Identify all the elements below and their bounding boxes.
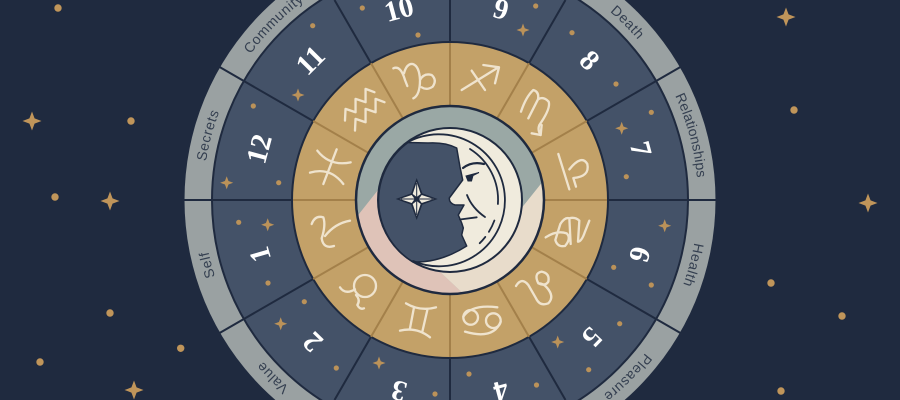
- face details: [463, 163, 484, 168]
- house label: Relationships: Relationships: [676, 92, 706, 177]
- house numbers: 12: [241, 131, 279, 167]
- house numbers: 7: [623, 138, 658, 160]
- house numbers: 8: [573, 44, 606, 77]
- dark moon disc with face profile: [379, 142, 467, 262]
- house numbers: 5: [575, 321, 608, 353]
- house numbers: 1: [243, 243, 278, 266]
- zodiac glyphs: Aries, Taurus, Gemini: [312, 217, 436, 337]
- outer ring: life areas: [184, 0, 716, 400]
- crescent moon with face: [378, 128, 522, 272]
- house numbers: [241, 0, 658, 400]
- house label: Value: Value: [259, 362, 286, 394]
- house label: Health: Health: [684, 244, 704, 286]
- zodiac glyphs: Sagittarius, Scorpio, Libra: [462, 65, 588, 189]
- house numbers: 2: [297, 325, 329, 358]
- central medallion background: [357, 107, 543, 293]
- house label: Death: Death: [610, 5, 642, 39]
- crescent inner arcs: [408, 134, 505, 266]
- zodiac glyphs: Capricorn, Aquarius, Pisces: [310, 64, 435, 184]
- house label: Secrets: Secrets: [197, 110, 218, 160]
- four-point star in moon disc: [396, 178, 438, 220]
- zodiac ring: [292, 42, 608, 358]
- house numbers: 6: [622, 243, 657, 266]
- house decoration stars and dots: [220, 3, 671, 397]
- house label: Self: Self: [198, 253, 214, 278]
- zodiac glyphs: Cancer, Leo, Virgo: [463, 218, 589, 334]
- house numbers: 11: [290, 40, 332, 82]
